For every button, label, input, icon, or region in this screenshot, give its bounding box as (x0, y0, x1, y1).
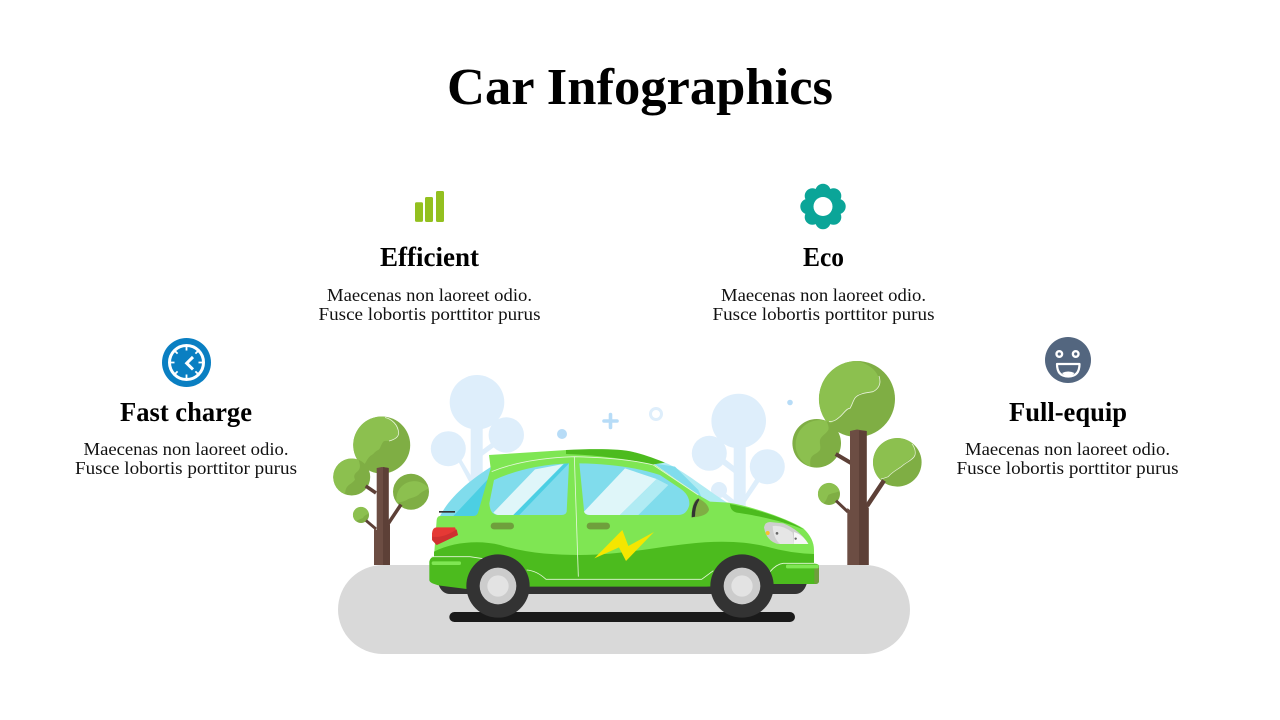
text block: fast charge: Maecenas non laoreet odio. (84, 439, 288, 459)
car (429, 449, 819, 618)
panel: eco (712, 184, 935, 324)
text block: fast charge (75, 439, 297, 478)
tree: left (333, 416, 429, 565)
side mirror (692, 498, 709, 517)
roof band (566, 449, 665, 465)
heading: fast charge: Fast charge (120, 397, 252, 427)
lightning bolt (594, 530, 654, 561)
crowns (333, 416, 429, 523)
bumper tip (814, 565, 819, 584)
panel: efficient (318, 191, 541, 324)
text block: full-equip (956, 439, 1179, 478)
branches (836, 454, 884, 512)
title: Car Infographics (447, 59, 833, 116)
text block: eco: Maecenas non laoreet odio. (721, 285, 926, 305)
rear wheel (466, 554, 530, 618)
tail light (432, 527, 458, 545)
text block: efficient: Maecenas non laoreet odio. (327, 285, 532, 305)
decorative bubbles (557, 400, 793, 439)
body lines (432, 457, 817, 579)
text block: eco (712, 285, 935, 324)
road shadow line (449, 612, 795, 622)
heading: full-equip: Full-equip (1009, 397, 1127, 427)
text block: full-equip: Maecenas non laoreet odio. (965, 439, 1170, 459)
headlight (764, 522, 808, 544)
icon: flower (800, 184, 846, 229)
background tree: right pale blue (692, 394, 785, 510)
text block: full-equip: Fusce lobortis porttitor purus (956, 458, 1179, 478)
background tree: left pale blue (431, 375, 524, 495)
heading: eco: Eco (803, 242, 844, 272)
panel: full-equip (956, 337, 1179, 478)
front side window (579, 463, 689, 515)
heading: efficient: Efficient (380, 242, 479, 272)
hood band (730, 504, 803, 529)
rear wiper (439, 511, 455, 513)
icon: clock (162, 338, 211, 387)
front wheel (710, 554, 774, 618)
rear side window (489, 463, 569, 515)
rear glass (440, 467, 491, 516)
car underbody (438, 584, 807, 594)
text block: eco: Fusce lobortis porttitor purus (712, 304, 935, 324)
text block: efficient: Fusce lobortis porttitor purus (318, 304, 541, 324)
icon: bars (415, 191, 444, 222)
trunk (374, 467, 390, 565)
car body lower (429, 542, 819, 589)
text block: fast charge: Fusce lobortis porttitor purus (75, 458, 297, 478)
tree: right (792, 361, 922, 565)
windshield (653, 463, 728, 503)
panel: fast charge (75, 338, 297, 478)
bumper highlights (432, 561, 819, 568)
text block: efficient (318, 285, 541, 324)
icon: smiley (1045, 337, 1091, 383)
crowns (792, 361, 922, 505)
car body upper (434, 450, 814, 573)
door handles (491, 523, 610, 529)
ground (338, 565, 910, 654)
branches (366, 486, 401, 529)
trunk (847, 430, 869, 565)
